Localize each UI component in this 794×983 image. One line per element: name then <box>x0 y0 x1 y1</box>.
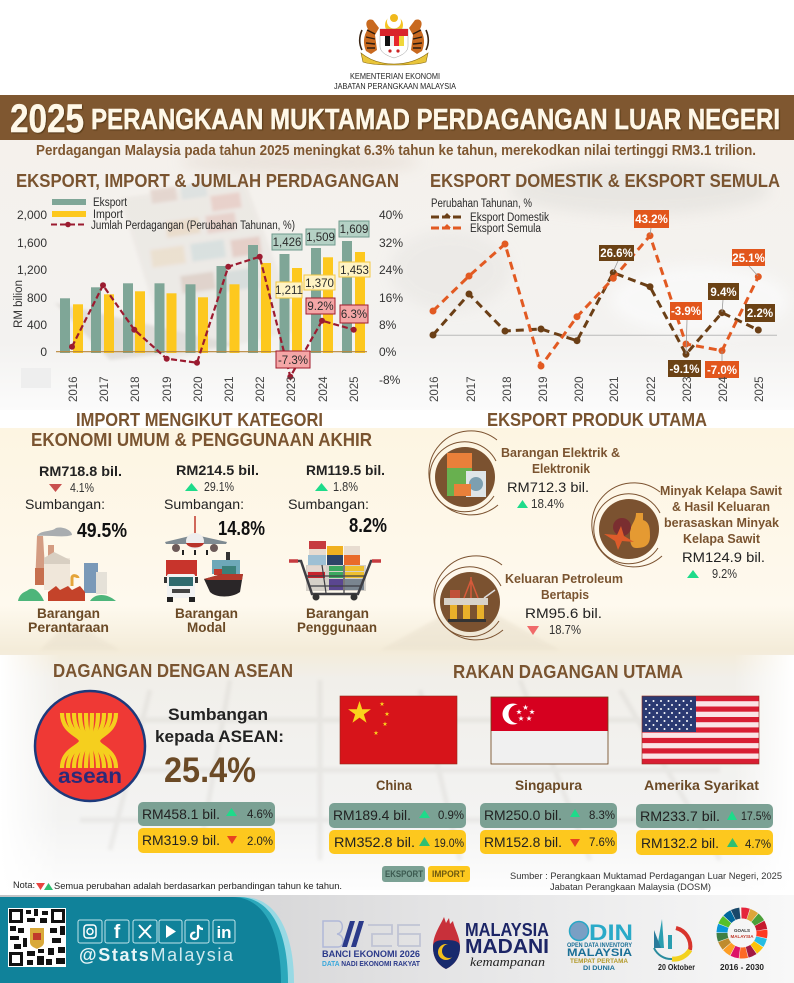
axis: years right <box>429 376 766 402</box>
panel: asean share: kepada ASEAN: <box>155 727 284 746</box>
line: eksport domestik <box>430 269 762 358</box>
logo: malaysia madani: MADANI <box>465 936 549 958</box>
axis: years right: 2018 <box>502 376 514 402</box>
axis: years left: 2019 <box>162 376 174 402</box>
axis: years left: 2016 <box>68 376 80 402</box>
logo: 20 oktober: 20 Oktober <box>658 963 695 972</box>
heading: eksport import: EKSPORT, IMPORT & JUMLAH PERDAGANGAN <box>16 171 399 191</box>
heading: dagangan asean: DAGANGAN DENGAN ASEAN <box>53 661 293 681</box>
panel: palm oil products: RM124.9 bil. <box>682 549 765 565</box>
panel: barangan perantaraan <box>18 463 127 635</box>
axis: percent right: 8% <box>379 318 397 332</box>
panel: barangan perantaraan: Barangan <box>37 605 100 621</box>
legend: growth chart: Eksport Semula <box>470 223 542 235</box>
panel: amerika syarikat: Amerika Syarikat <box>644 777 759 793</box>
axis: years left: 2024 <box>318 376 330 402</box>
crest scroll <box>361 53 428 65</box>
logo: asean <box>35 691 145 801</box>
axis: years left: 2021 <box>224 376 236 402</box>
flag: singapore <box>491 697 608 764</box>
panel: barangan modal: RM214.5 bil. <box>176 462 259 478</box>
axis: RM bilion left: 1,200 <box>17 263 47 277</box>
axis: years right: 2024 <box>718 376 730 402</box>
axis: years right: 2023 <box>682 376 694 402</box>
axis: years left: 2022 <box>255 376 267 402</box>
logo: sdg wheel: MALAYSIA <box>730 934 754 939</box>
logo: odin: DI DUNIA <box>583 965 615 972</box>
axis: years left <box>68 376 361 402</box>
axis: years left: 2020 <box>193 376 205 402</box>
axis: percent right: 24% <box>379 263 403 277</box>
panel: barangan perantaraan: Perantaraan <box>28 619 109 635</box>
pills: usa values: RM132.2 bil. <box>641 835 719 851</box>
pills: china values: 19.0% <box>434 836 464 850</box>
logo: odin: OPEN DATA INVENTORY <box>567 943 632 949</box>
panel: petroleum products: Keluaran Petroleum <box>505 571 623 586</box>
pills: singapore values: RM152.8 bil. <box>484 834 562 850</box>
panel: barangan penggunaan: RM119.5 bil. <box>306 462 385 478</box>
logo: odin <box>567 920 633 972</box>
axis: years left: 2017 <box>99 376 111 402</box>
pills: singapore values: RM250.0 bil. <box>484 807 562 823</box>
panel: palm oil products <box>592 483 783 581</box>
axis: years right: 2025 <box>754 376 766 402</box>
panel: barangan modal <box>164 462 265 635</box>
footer <box>0 895 794 983</box>
pills: usa values: RM233.7 bil. <box>640 808 720 824</box>
callouts: domestic and re-export values: 43.2% <box>635 214 668 226</box>
title banner: 2025 <box>10 97 84 141</box>
logo: banci ekonomi: DATA NADI EKONOMI RAKYAT <box>322 959 420 968</box>
axis: percent right: -8% <box>379 373 401 387</box>
callouts: trade growth: 9.2% <box>307 301 334 313</box>
panel: barangan penggunaan: Sumbangan: <box>288 496 369 512</box>
icon: oil rig <box>434 556 503 640</box>
callouts: trade growth <box>276 298 368 368</box>
logo: odin: MALAYSIA <box>567 947 632 959</box>
icon: appliances <box>429 431 498 515</box>
pills: usa values: 17.5% <box>741 809 771 823</box>
pills: singapore values: 7.6% <box>589 835 615 849</box>
logo: asean: asean <box>58 765 122 788</box>
ministry text: KEMENTERIAN EKONOMI <box>350 72 440 81</box>
axis: percent right: 16% <box>379 291 403 305</box>
social icons: in <box>216 923 232 942</box>
panel: barangan perantaraan: Sumbangan: <box>25 496 105 512</box>
panel: barangan penggunaan: Penggunaan <box>297 619 377 635</box>
callouts: import values <box>275 262 370 298</box>
crest shield <box>380 29 408 58</box>
panel: petroleum products: 18.7% <box>549 623 581 637</box>
logo: sdg wheel: 2016 - 2030 <box>720 963 765 972</box>
panel: barangan penggunaan: Barangan <box>306 605 369 621</box>
panel: barangan penggunaan: 8.2% <box>349 515 387 537</box>
social handle: @StatsMalaysia <box>79 945 234 965</box>
icon: cargo ship <box>204 552 243 596</box>
axis: percent right: 40% <box>379 208 403 222</box>
pills: asean values: 4.6% <box>247 807 273 821</box>
logo: malaysia madani <box>433 917 549 969</box>
axis: years left: 2023 <box>286 376 298 402</box>
icon: palm oil <box>592 483 662 567</box>
axis: years right: 2022 <box>646 376 658 402</box>
panel: electrical products <box>429 431 620 515</box>
axis: years right: 2016 <box>429 376 441 402</box>
axis: RM bilion left: 800 <box>27 291 47 305</box>
chart: eksport import bars and trade line <box>13 197 403 402</box>
legend: growth chart: Eksport Domestik <box>470 212 549 224</box>
icon: factory <box>18 527 116 601</box>
callouts: domestic and re-export values <box>599 210 775 378</box>
title banner <box>0 95 794 141</box>
callouts: import values: 1,370 <box>305 278 334 290</box>
panel: electrical products: 18.4% <box>531 497 564 511</box>
logo: sdg wheel <box>714 905 770 972</box>
panel: barangan modal: 14.8% <box>218 518 265 540</box>
ministry text: JABATAN PERANGKAAN MALAYSIA <box>334 82 457 91</box>
icon: airplane <box>165 516 227 555</box>
pills: china values: 0.9% <box>438 808 464 822</box>
logo: banci ekonomi <box>322 921 420 968</box>
legend: eksport and import: EKSPORT <box>385 869 423 879</box>
heading: eksport produk utama: EKSPORT PRODUK UTAMA <box>487 410 707 430</box>
pills: china values: RM352.8 bil. <box>334 834 415 850</box>
panel: barangan modal: Sumbangan: <box>164 496 244 512</box>
panel: petroleum products: Bertapis <box>541 587 589 602</box>
callouts: domestic and re-export values: 26.6% <box>600 248 633 260</box>
callouts: eksport values: 1,509 <box>306 232 335 244</box>
crest right tiger <box>409 19 428 54</box>
axis: years left: 2018 <box>130 376 142 402</box>
axis: years right: 2020 <box>574 376 586 402</box>
callouts: domestic and re-export values: 25.1% <box>732 253 765 265</box>
QR code <box>8 908 66 967</box>
source: Jabatan Perangkaan Malaysia (DOSM) <box>550 882 711 893</box>
pills: singapore values: 8.3% <box>589 808 615 822</box>
crest sun and crescent <box>385 14 403 34</box>
pills: asean values: RM319.9 bil. <box>142 832 220 848</box>
panel: palm oil products: & Hasil Keluaran <box>672 499 770 514</box>
panel: amerika syarikat <box>636 696 773 855</box>
icon: shopping cart <box>289 541 381 600</box>
bars: eksport <box>60 241 352 353</box>
callouts: domestic and re-export values: 2.2% <box>747 308 773 320</box>
logo: banci ekonomi: BANCI EKONOMI 2026 <box>322 949 420 960</box>
panel: petroleum products: RM95.6 bil. <box>525 605 602 621</box>
panel: asean share: 25.4% <box>164 751 256 790</box>
axis: RM bilion left: 0 <box>40 345 47 359</box>
callouts: eksport values <box>272 221 369 250</box>
panel: singapura <box>480 697 617 854</box>
panel: barangan modal: Modal <box>187 619 226 635</box>
panel: palm oil products: Minyak Kelapa Sawit <box>660 483 783 498</box>
bars: import <box>73 252 365 353</box>
axis: percent right <box>379 208 403 387</box>
pills: china values <box>329 803 466 854</box>
heading: import categories <box>31 410 372 450</box>
axis: percent right: 32% <box>379 236 403 250</box>
legend: bar chart: Import <box>93 209 124 221</box>
flag: usa <box>642 696 759 764</box>
legend: growth chart <box>431 198 549 235</box>
panel: electrical products: RM712.3 bil. <box>507 479 589 495</box>
panel: asean share <box>155 705 284 790</box>
logo: sdg wheel: GOALS <box>734 928 750 933</box>
crest left tiger <box>360 19 379 54</box>
legend: bar chart <box>51 197 295 232</box>
ministry text <box>334 72 457 91</box>
panel: barangan modal: Barangan <box>175 605 238 621</box>
pills: usa values: 4.7% <box>745 837 771 851</box>
panel: barangan penggunaan: 1.8% <box>333 480 358 494</box>
pills: asean values <box>138 802 275 853</box>
panel: palm oil products: Kelapa Sawit <box>683 531 761 546</box>
panel: singapura: Singapura <box>515 777 582 793</box>
panel: asean share: Sumbangan <box>168 705 268 724</box>
callouts: domestic and re-export values: -3.9% <box>671 306 701 318</box>
panel: palm oil products: berasaskan Minyak <box>664 515 780 530</box>
panel: electrical products: Barangan Elektrik & <box>501 445 620 460</box>
panel: barangan penggunaan <box>288 462 387 635</box>
legend: eksport and import: IMPORT <box>432 869 465 879</box>
source: Sumber : Perangkaan Muktamad Perdagangan Luar Negeri, 2025 <box>510 871 782 882</box>
callouts: domestic and re-export values: -9.1% <box>669 364 700 376</box>
logo: 20 oktober <box>654 919 695 972</box>
pills: singapore values <box>480 803 617 854</box>
legend: bar chart: Jumlah Perdagangan (Perubahan Tahunan, %) <box>91 220 295 232</box>
callouts: import values: 1,211 <box>275 285 303 297</box>
axis: RM bilion left: RM bilion <box>13 280 25 328</box>
pills: asean values: 2.0% <box>247 834 273 848</box>
callouts: import values: 1,453 <box>340 265 369 277</box>
legend: eksport and import <box>382 866 470 882</box>
placeholder box <box>21 368 51 388</box>
heading: import categories: IMPORT MENGIKUT KATEGORI <box>76 410 323 430</box>
legend: growth chart: Perubahan Tahunan, % <box>431 198 532 210</box>
chart: domestic and re-export growth <box>429 198 777 402</box>
panel: petroleum products <box>434 556 623 640</box>
pills: usa values <box>636 804 773 855</box>
axis: years right: 2017 <box>466 376 478 402</box>
axis: percent right: 0% <box>379 345 397 359</box>
panel: barangan perantaraan: 49.5% <box>77 520 127 542</box>
line: jumlah perdagangan <box>69 254 357 380</box>
axis: years right: 2021 <box>609 376 621 402</box>
axis: RM bilion left: 2,000 <box>17 208 47 222</box>
logo: malaysia madani: MALAYSIA <box>465 920 549 940</box>
icon: truck <box>164 560 198 602</box>
panel: barangan modal: 29.1% <box>204 480 234 494</box>
social icons <box>78 920 235 943</box>
heading: rakan dagangan: RAKAN DAGANGAN UTAMA <box>453 662 683 682</box>
panel: palm oil products: 9.2% <box>712 567 737 581</box>
panel: china <box>329 696 466 854</box>
panel: electrical products: Elektronik <box>532 461 591 476</box>
logo: malaysia madani: kemampanan <box>470 954 545 969</box>
callouts: eksport values: 1,426 <box>273 237 301 249</box>
axis: years right: 2019 <box>538 376 550 402</box>
social icons: f <box>114 922 121 943</box>
panel: barangan perantaraan: 4.1% <box>70 481 94 495</box>
heading: import categories: EKONOMI UMUM & PENGGUNAAN AKHIR <box>31 430 372 450</box>
note: Nota: <box>13 880 35 890</box>
axis: RM bilion left <box>13 208 47 359</box>
pills: asean values: RM458.1 bil. <box>142 806 220 822</box>
legend: bar chart: Eksport <box>93 197 128 209</box>
axis: years left: 2025 <box>349 376 361 402</box>
flag: china <box>340 696 457 764</box>
logo: odin: DIN <box>589 920 633 945</box>
callouts: eksport values: 1,609 <box>340 224 368 236</box>
logo: Malaysia coat of arms <box>360 14 428 65</box>
note: Semua perubahan adalah berdasarkan perbandingan tahun ke tahun. <box>54 881 342 892</box>
source <box>510 871 782 893</box>
callouts: trade growth: -7.3% <box>278 355 308 367</box>
pills: china values: RM189.4 bil. <box>333 807 411 823</box>
panel: china: China <box>376 777 412 793</box>
axis: RM bilion left: 1,600 <box>17 236 47 250</box>
logo: odin: TEMPAT PERTAMA <box>570 958 628 965</box>
axis: RM bilion left: 400 <box>27 318 47 332</box>
callouts: trade growth: 6.3% <box>341 309 367 321</box>
panel: barangan perantaraan: RM718.8 bil. <box>39 463 122 479</box>
line: eksport semula <box>430 232 762 370</box>
callouts: domestic and re-export values: -7.0% <box>707 365 737 377</box>
callouts: domestic and re-export values: 9.4% <box>710 287 737 299</box>
